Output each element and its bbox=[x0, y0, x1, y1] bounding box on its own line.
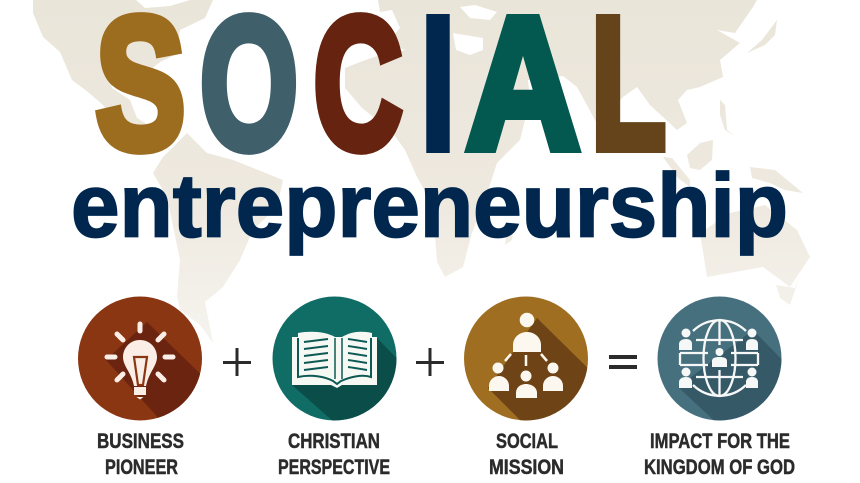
label: christian perspective: PERSPECTIVE bbox=[278, 456, 390, 479]
label: social mission: MISSION bbox=[489, 456, 564, 479]
plus sign bbox=[416, 348, 444, 376]
world map background bbox=[33, 0, 810, 343]
icon: social mission people bbox=[464, 296, 588, 420]
label: impact for the kingdom of god: IMPACT FOR THE bbox=[650, 430, 790, 453]
label: christian perspective: CHRISTIAN bbox=[288, 430, 380, 453]
label: business pioneer: BUSINESS bbox=[97, 430, 184, 453]
label: impact for the kingdom of god: KINGDOM OF GOD bbox=[644, 456, 795, 479]
equals sign bbox=[609, 357, 637, 367]
title: SOCIAL bbox=[96, 0, 666, 188]
label: social mission bbox=[489, 430, 564, 479]
label: christian perspective bbox=[278, 430, 390, 479]
plus sign bbox=[223, 348, 251, 376]
label: social mission: SOCIAL bbox=[496, 430, 558, 453]
icon: light bulb bbox=[78, 296, 202, 420]
subtitle: entrepreneurship: entrepreneurship bbox=[71, 156, 788, 256]
label: business pioneer: PIONEER bbox=[105, 456, 178, 479]
icon: globe with people bbox=[658, 296, 782, 420]
label: impact for the kingdom of god bbox=[644, 430, 795, 479]
label: business pioneer bbox=[97, 430, 184, 479]
icon: open book bbox=[272, 296, 396, 420]
